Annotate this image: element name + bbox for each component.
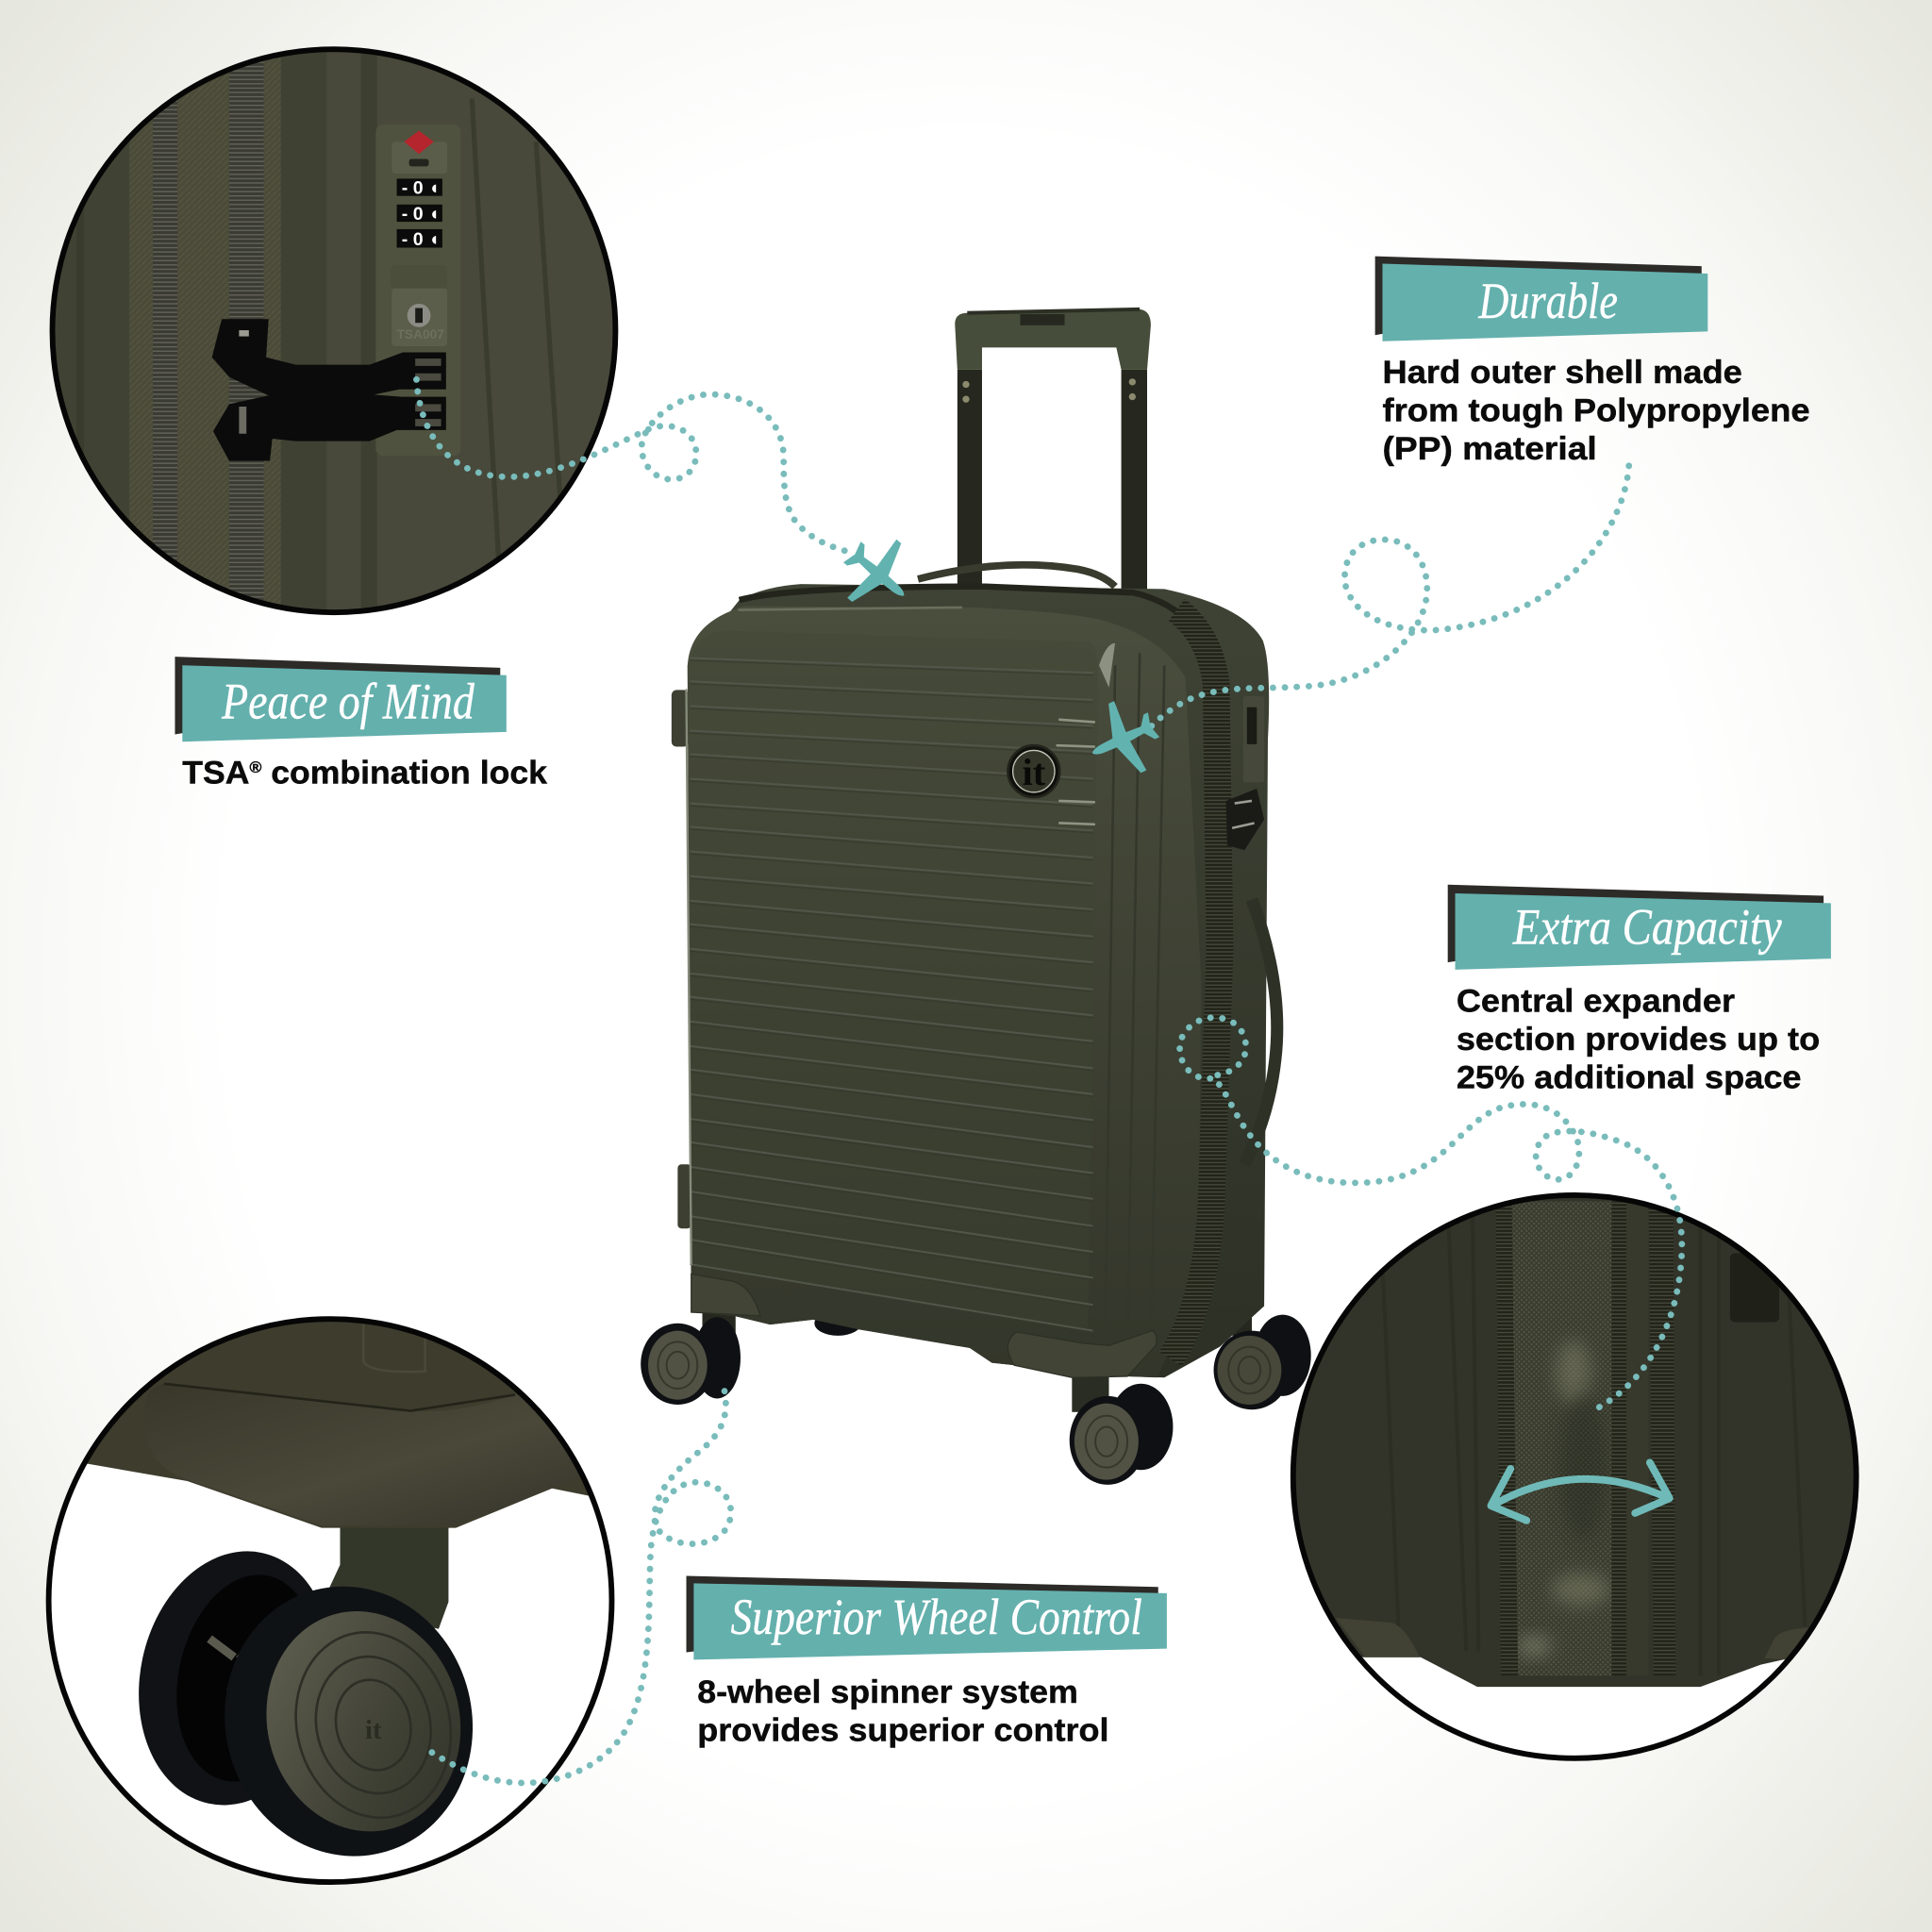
front shell bbox=[688, 607, 1201, 1377]
banner bbox=[1448, 885, 1831, 970]
description: 8-wheel spinner system bbox=[697, 1674, 1078, 1710]
rear wheel bbox=[139, 1551, 313, 1806]
panel: wheel detail circle bbox=[47, 1306, 616, 1885]
banner bbox=[687, 1576, 1167, 1659]
callout: peace of mind bbox=[175, 657, 548, 791]
description: section provides up to bbox=[1457, 1022, 1820, 1058]
side lock bbox=[1243, 696, 1264, 782]
description: provides superior control bbox=[697, 1713, 1109, 1749]
description: 25% additional space bbox=[1457, 1059, 1802, 1095]
description: combination lock bbox=[261, 756, 548, 791]
telescopic handle bbox=[955, 309, 1151, 591]
banner: Superior Wheel Control bbox=[731, 1589, 1142, 1645]
icon: airplane on suitcase side bbox=[1076, 691, 1170, 788]
description: TSA bbox=[182, 756, 248, 791]
icon: airplane on top of suitcase bbox=[827, 523, 928, 625]
corner bumpers bbox=[1336, 1618, 1808, 1659]
side zipper bbox=[1171, 610, 1220, 1359]
corner bumpers bbox=[691, 1274, 1157, 1377]
callout: superior wheel control bbox=[687, 1576, 1167, 1749]
wheel housing bbox=[87, 1322, 589, 1528]
dotted flight path: extra capacity bbox=[1180, 1018, 1682, 1407]
banner: Peace of Mind bbox=[221, 673, 475, 729]
side bumpers bbox=[672, 690, 691, 1228]
ribbed front panel bbox=[688, 631, 1098, 1331]
rear shell bbox=[688, 584, 1269, 1377]
top zipper bbox=[740, 587, 1192, 626]
wheel logo: it bbox=[365, 1715, 382, 1745]
dials: - 0 ◖ bbox=[402, 229, 440, 250]
side ridges bbox=[1106, 653, 1164, 1349]
panel: expander detail circle bbox=[1291, 1192, 1860, 1762]
brand badge: it bbox=[1022, 751, 1046, 793]
model number: TSA007 bbox=[397, 327, 444, 341]
description bbox=[697, 1674, 1109, 1749]
side carry handle bbox=[1244, 899, 1277, 1164]
wheel: front right bbox=[1070, 1396, 1146, 1485]
description: Hard outer shell made bbox=[1382, 355, 1742, 391]
edge highlights bbox=[687, 608, 1115, 1264]
description bbox=[1457, 983, 1820, 1095]
callout: durable bbox=[1375, 257, 1810, 467]
wheel: front left bbox=[641, 1324, 715, 1405]
description: (PP) material bbox=[1382, 431, 1597, 467]
dials bbox=[397, 178, 442, 250]
panel: combination lock detail circle bbox=[49, 49, 619, 616]
zipper pulls bbox=[212, 319, 446, 460]
description: from tough Polypropylene bbox=[1382, 393, 1810, 429]
banner: Extra Capacity bbox=[1512, 898, 1782, 955]
mesh panel bbox=[1510, 1201, 1615, 1675]
zipper tape bbox=[129, 49, 281, 616]
lock panel bbox=[375, 125, 460, 456]
dotted flight path: wheels bbox=[427, 1391, 731, 1783]
description: Central expander bbox=[1457, 983, 1735, 1019]
stem bbox=[329, 1528, 449, 1629]
top carry handle bbox=[918, 565, 1115, 587]
callout: extra capacity bbox=[1448, 885, 1831, 1095]
description bbox=[1382, 355, 1810, 467]
dotted flight path: lock to luggage top bbox=[416, 379, 853, 553]
wheels back bbox=[693, 1306, 1311, 1470]
shell bbox=[1291, 1192, 1860, 1687]
description: ® bbox=[250, 758, 262, 776]
zippers bbox=[1496, 1201, 1675, 1675]
banner bbox=[1375, 257, 1707, 341]
zipper pulls bbox=[1226, 789, 1264, 850]
banner: Durable bbox=[1478, 273, 1618, 329]
dotted flight path: durable bbox=[1148, 466, 1629, 729]
suitcase product bbox=[641, 309, 1311, 1485]
banner bbox=[175, 657, 507, 741]
key cylinder bbox=[408, 304, 430, 327]
dials: - 0 ◖ bbox=[402, 178, 440, 199]
arrow: expansion double arrow bbox=[1491, 1462, 1670, 1521]
dials: - 0 ◖ bbox=[402, 204, 440, 225]
wheel: back right bbox=[1214, 1331, 1291, 1409]
brand badge bbox=[1008, 745, 1059, 797]
handle recess bbox=[1730, 1253, 1779, 1322]
front wheel bbox=[225, 1587, 474, 1857]
TSA diamond bbox=[404, 130, 434, 154]
